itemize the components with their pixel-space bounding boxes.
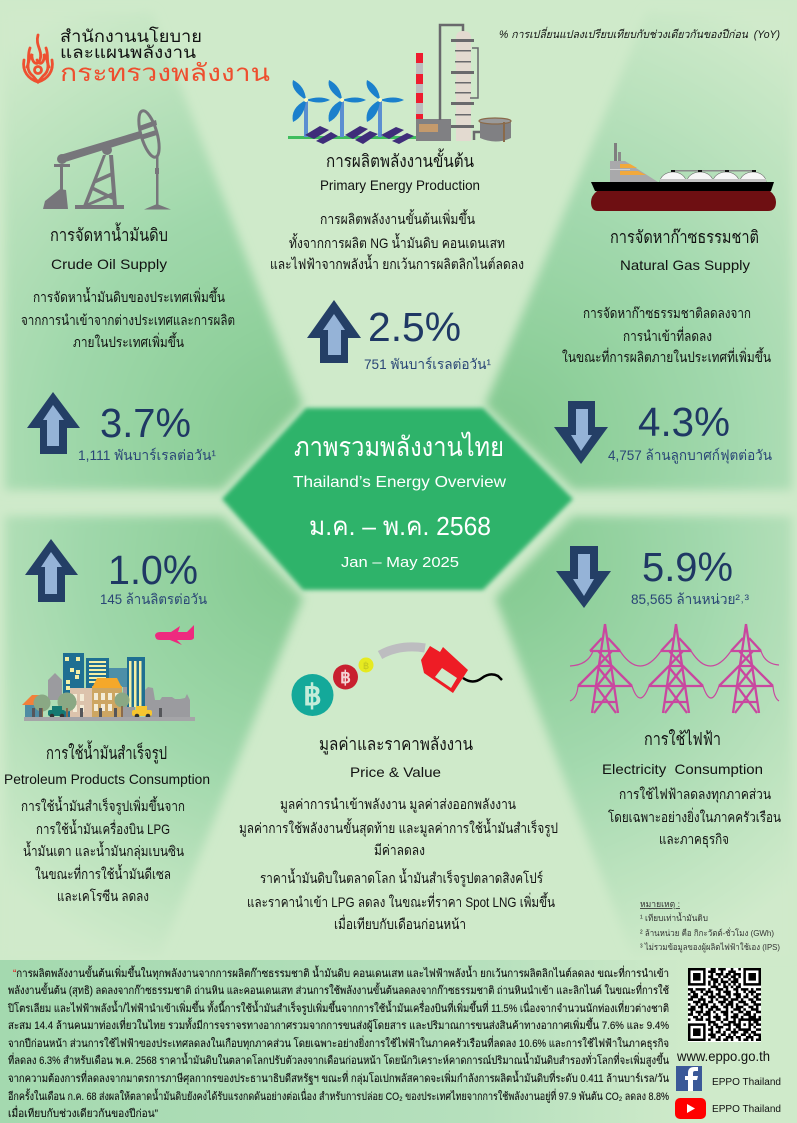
panel: natural gas supply: [485, 12, 792, 490]
icon: up arrow: [307, 300, 361, 363]
text block: primary energy: ทั้งจากการผลิต NG น้ำมันดิบ คอนเดนเสท: [289, 233, 505, 251]
text block: natural gas: การนำเข้าที่ลดลง: [623, 327, 712, 344]
text block: price: [239, 796, 558, 932]
icon: up arrow: [27, 392, 80, 454]
panel: central overview hexagon: [222, 408, 573, 590]
text: office name: สำนักงานนโยบาย: [60, 26, 202, 46]
title: Thai: ภาพรวมพลังงานไทย: [294, 432, 504, 462]
period: Thai: ม.ค. – พ.ค. 2568: [309, 511, 491, 541]
panel: summary paragraph: เมื่อเทียบกับช่วงเดียวกันของปีก่อน”: [8, 1105, 158, 1120]
panel: summary paragraph: จากปีก่อนหน้า ส่วนการใช้ไฟฟ้าของประเทศลดลงในเกือบทุกภาคส่วน โดยเฉพาะอย่างยิ่งการใช้ไฟฟ้าในภาคครัวเรือนที่ลดลง 10.6% และการใช้ไฟฟ้าในภาคธุรกิจ: [8, 1035, 669, 1050]
website: www.eppo.go.th: [676, 1048, 770, 1064]
icon: down arrow: [556, 546, 611, 608]
heading: natural gas: การจัดหาก๊าซธรรมชาติ: [610, 227, 759, 247]
panel: summary paragraph: จากความต้องการที่ลดลงจากมาตรการภาษีศุลกากรของประธานาธิบดีสหรัฐฯ ขณะที่ กลุ่มโอเปกพลัสคาดจะเพิ่มกำลังการผลิตน้ำมันดิบที่ระดับ 0.411 ล้านบาร์เรล/วัน: [8, 1070, 669, 1085]
text block: primary energy: การผลิตพลังงานขั้นต้นเพิ่มขึ้น: [320, 209, 475, 227]
text block: primary energy: [270, 209, 524, 272]
text block: price: เมื่อเทียบกับเดือนก่อนหน้า: [334, 915, 466, 932]
icon: down arrow: [554, 401, 608, 464]
number: 5.9%: 5.9%: [642, 544, 733, 590]
text block: natural gas: [562, 305, 771, 365]
text block: electricity: และภาคธุรกิจ: [659, 831, 729, 848]
label: Facebook: EPPO Thailand: [712, 1077, 781, 1088]
panel: summary paragraph: ปิโตรเลียม และไฟฟ้าพลังน้ำ/ไฟฟ้านำเข้าเพิ่มขึ้น ทั้งนี้การใช้น้ำมันสำเร็จรูปเพิ่มขึ้นจากการใช้น้ำมันเครื่องบินที่เพิ่มขึ้นที่ 11.5% เนื่องจากจำนวนนักท่องเที่ยวต่างชาติ: [7, 1000, 669, 1015]
text block: price: มีค่าลดลง: [374, 842, 425, 858]
text block: primary energy: และไฟฟ้าจากพลังน้ำ ยกเว้นการผลิตลิกไนต์ลดลง: [270, 254, 524, 272]
footnotes: ¹ เทียบเท่าน้ำมันดิบ: [640, 912, 708, 923]
number: 2.5%: 2.5%: [368, 304, 461, 350]
footnotes: ³ ไม่รวมข้อมูลของผู้ผลิตไฟฟ้าใช้เอง (IPS): [640, 942, 780, 953]
icon: oil pump jack: [43, 109, 171, 210]
unit: electricity: 85,565 ล้านหน่วย²˒³: [631, 591, 749, 607]
text block: price: มูลค่าการนำเข้าพลังงาน มูลค่าส่งออกพลังงาน: [280, 796, 516, 813]
text block: natural gas: การจัดหาก๊าซธรรมชาติลดลงจาก: [583, 305, 751, 321]
icon: airplane: [155, 625, 194, 645]
panel: primary energy production: [270, 25, 524, 372]
text block: price: มูลค่าการใช้พลังงานขั้นสุดท้าย และมูลค่าการใช้น้ำมันสำเร็จรูป: [239, 818, 558, 837]
text block: crude oil: ภายในประเทศเพิ่มขึ้น: [73, 332, 184, 350]
unit: primary energy: 751 พันบาร์เรลต่อวัน¹: [364, 356, 491, 372]
number: 3.7%: 3.7%: [100, 400, 191, 446]
panel: petroleum products consumption: [4, 516, 303, 955]
text block: electricity: การใช้ไฟฟ้าลดลงทุกภาคส่วน: [619, 786, 771, 803]
logo: และแผนพลังงาน: [60, 43, 196, 62]
heading: petroleum: การใช้น้ำมันสำเร็จรูป: [46, 740, 167, 764]
footnotes: [640, 899, 780, 953]
QR code: [688, 968, 761, 1042]
panel: summary paragraph: พลังงานขั้นต้น (สุทธิ) ลดลงจากก๊าซธรรมชาติ ถ่านหิน และคอนเดนเสท ส่วนการใช้พลังงานขั้นต้นลดลงจากก๊าซธรรมชาติ ถ่านหินนำเข้า และลิกไนต์ ในขณะที่การใช้: [8, 982, 669, 997]
icon: up arrow: [25, 539, 78, 602]
label: YouTube: EPPO Thailand: [712, 1104, 781, 1115]
subheading: petroleum: Petroleum Products Consumption: [4, 771, 210, 787]
panel: electricity consumption: [495, 516, 792, 955]
text block: price: และราคานำเข้า LPG ลดลง ในขณะที่ราคา Spot LNG เพิ่มขึ้น: [247, 892, 555, 910]
icon: LNG tanker: [591, 143, 776, 211]
text block: crude oil: การจัดหาน้ำมันดิบของประเทศเพิ่มขึ้น: [33, 287, 225, 305]
icon: wind turbines, solar panels and refinery: [288, 25, 511, 144]
icon: flame: [24, 35, 52, 82]
subtitle: English: Thailand’s Energy Overview: [293, 474, 506, 491]
icon: transmission towers: [570, 624, 779, 713]
text block: crude oil: [21, 287, 235, 350]
icon: YouTube: [675, 1098, 706, 1119]
heading: electricity: การใช้ไฟฟ้า: [644, 729, 721, 749]
text block: petroleum: ในขณะที่การใช้น้ำมันดีเซล: [35, 864, 171, 882]
panel: summary paragraph: [0, 960, 690, 1123]
heading: price: มูลค่าและราคาพลังงาน: [319, 734, 473, 755]
panel: summary paragraph: “การผลิตพลังงานขั้นต้นเพิ่มขึ้นในทุกพลังงานจากการผลิตก๊าซธรรมชาติ น้ำมันดิบ คอนเดนเสท และไฟฟ้าพลังน้ำ ยกเว้นการผลิตลิกไนต์ลดลง ขณะที่การนำเข้า: [13, 965, 669, 980]
panel: price and value: [239, 646, 558, 932]
icon: coins and fuel nozzle: ฿: [363, 661, 369, 672]
logo: กระทรวงพลังงาน: [60, 60, 270, 87]
text block: petroleum: และเคโรซีน ลดลง: [57, 888, 149, 904]
panel: summary paragraph: สะสม 14.4 ล้านคนมาท่องเที่ยวในไทย รวมทั้งมีการจราจรทางอากาศรวมจากการขนส่งผู้โดยสาร และปริมาณการขนส่งสินค้าทางอากาศเพิ่มขึ้น 7.6% และ 9.4%: [8, 1017, 669, 1032]
subheading: price: Price & Value: [350, 764, 441, 780]
logo: [24, 26, 270, 87]
subheading: electricity: Electricity Consumption: [602, 761, 763, 777]
text block: petroleum: [21, 796, 185, 904]
subheading: primary energy: Primary Energy Production: [320, 177, 480, 193]
note: YoY legend: % การเปลี่ยนแปลงเปรียบเทียบกับช่วงเดียวกันของปีก่อน (YoY): [499, 26, 780, 41]
footnotes: ² ล้านหน่วย คือ กิกะวัตต์-ชั่วโมง (GWh): [640, 927, 774, 938]
panel: contact: [675, 968, 781, 1119]
icon: coins and fuel nozzle: ฿: [340, 668, 351, 687]
icon: Facebook: [676, 1066, 702, 1091]
icon: coins and fuel nozzle: [292, 646, 502, 716]
text block: petroleum: การใช้น้ำมันสำเร็จรูปเพิ่มขึ้นจาก: [21, 796, 185, 815]
panel: crude oil supply: [5, 12, 303, 490]
number: 4.3%: 4.3%: [638, 399, 730, 445]
panel: summary paragraph: อีกครั้งในเดือน ก.ค. 68 ส่งผลให้ตลาดน้ำมันดิบยังคงได้รับแรงกดดันอย่างต่อเนื่อง สำหรับการปล่อย CO₂ ของประเทศไทยจากการใช้พลังงานอยู่ที่ 97.9 พันตัน CO₂ ลดลง 8.8%: [8, 1088, 669, 1103]
subheading: crude oil: Crude Oil Supply: [51, 256, 167, 272]
icon: coins and fuel nozzle: ฿: [303, 680, 322, 712]
number: 1.0%: 1.0%: [108, 547, 198, 593]
text block: electricity: [608, 786, 781, 848]
text block: crude oil: จากการนำเข้าจากต่างประเทศและการผลิต: [21, 312, 235, 328]
heading: crude oil: การจัดหาน้ำมันดิบ: [50, 222, 168, 245]
text block: price: ราคาน้ำมันดิบในตลาดโลก น้ำมันสำเร็จรูปตลาดสิงคโปร์: [260, 868, 543, 887]
footnotes: หมายเหตุ :: [640, 899, 680, 910]
unit: natural gas: 4,757 ล้านลูกบาศก์ฟุตต่อวัน: [608, 447, 772, 464]
text block: petroleum: การใช้น้ำมันเครื่องบิน LPG: [36, 819, 170, 837]
icon: city skyline: [22, 653, 195, 721]
text block: petroleum: น้ำมันเตา และน้ำมันกลุ่มเบนซิน: [23, 841, 184, 860]
subheading: natural gas: Natural Gas Supply: [620, 257, 750, 273]
panel: summary paragraph: ที่ลดลง 6.3% สำหรับเดือน พ.ค. 2568 ราคาน้ำมันดิบในตลาดโลกปรับตัวลงจากเดือนก่อนหน้า โดยนักวิเคราะห์คาดการณ์ปริมาณน้ำมันดิบสำรองทั่วโลกที่จะเพิ่มสูงขึ้น: [8, 1052, 669, 1067]
heading: primary energy: การผลิตพลังงานขั้นต้น: [326, 148, 474, 171]
unit: crude oil: 1,111 พันบาร์เรลต่อวัน¹: [78, 447, 216, 463]
unit: petroleum: 145 ล้านลิตรต่อวัน: [100, 591, 207, 607]
period: English: Jan – May 2025: [341, 554, 459, 571]
